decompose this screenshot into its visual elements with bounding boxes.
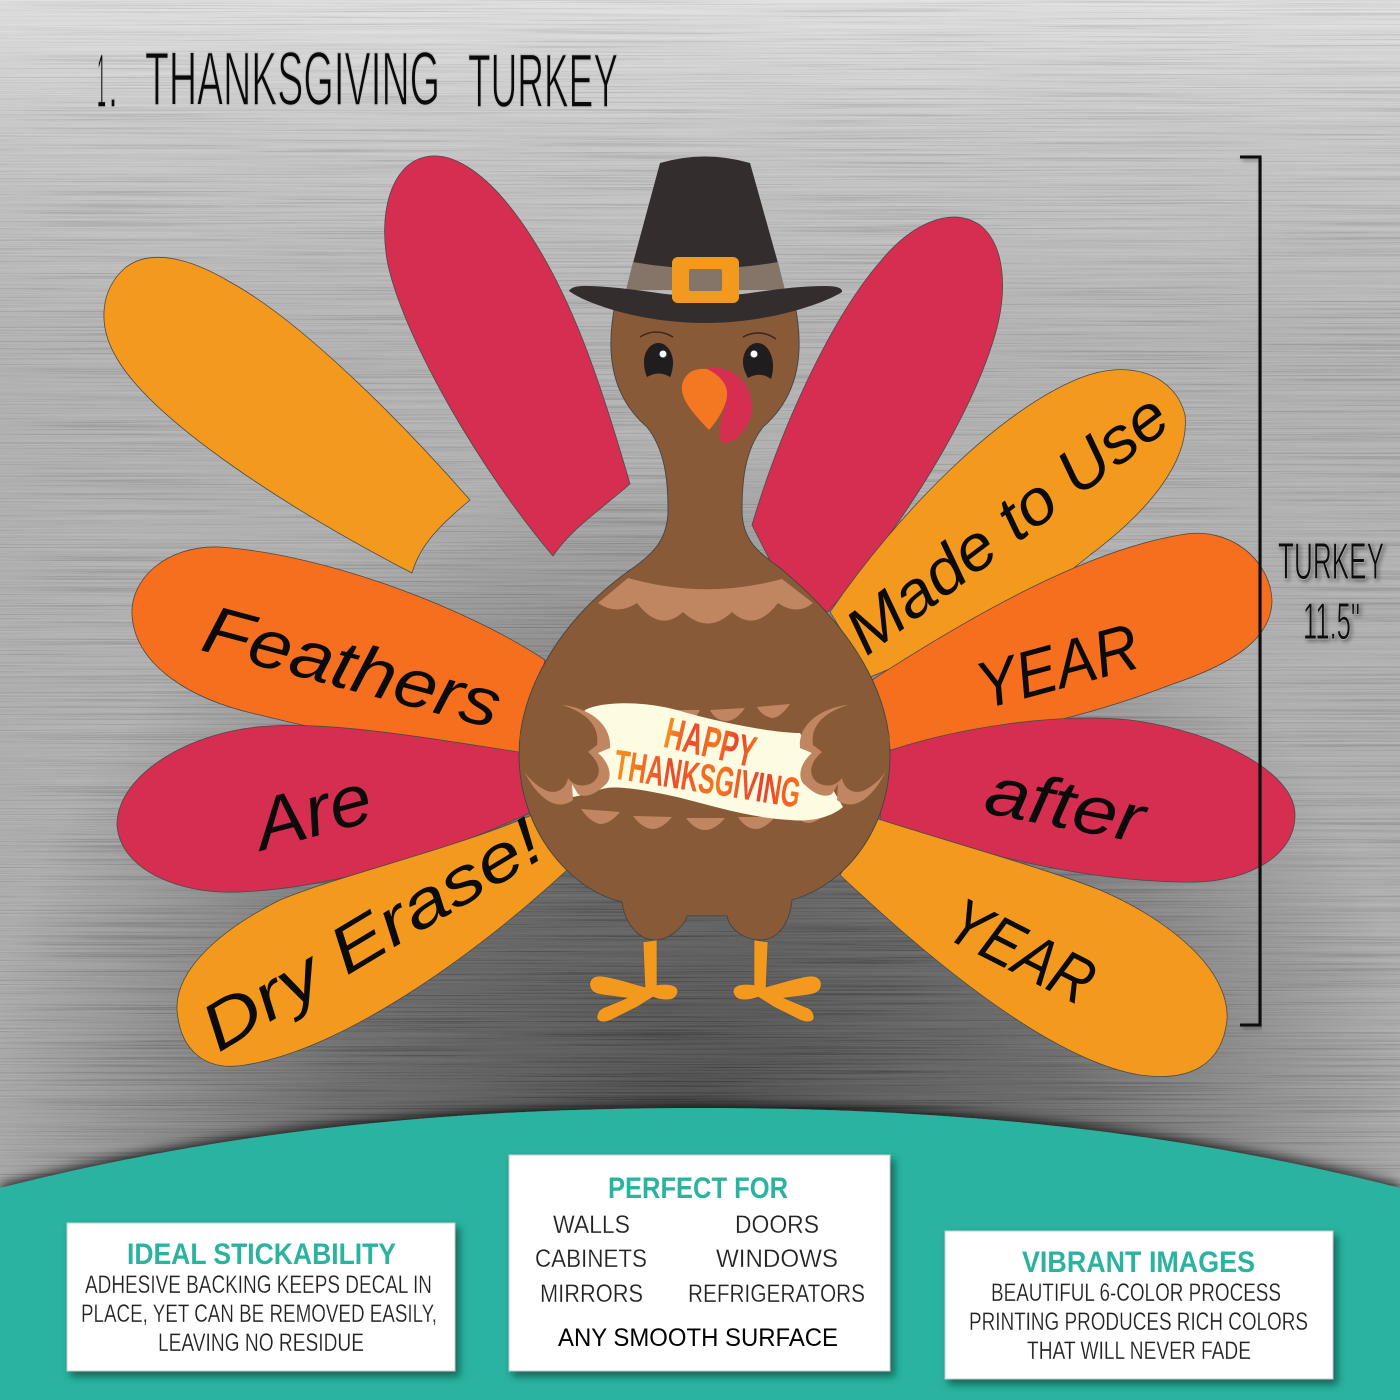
left wing <box>520 705 610 804</box>
feather: top right red <box>752 217 1003 612</box>
banner <box>560 703 843 820</box>
surface list <box>535 1211 865 1308</box>
title: THANKSGIVING <box>145 37 440 122</box>
surface list: DOORS <box>735 1211 819 1239</box>
body text: vibrant images: THAT WILL NEVER FADE <box>1027 1337 1251 1365</box>
heading: vibrant images: VIBRANT IMAGES <box>1022 1246 1255 1279</box>
handwritten words: Are <box>242 758 380 867</box>
feather: top left red <box>385 156 630 556</box>
eye highlights <box>660 350 758 358</box>
handwritten words: after <box>979 752 1154 858</box>
face <box>640 332 776 443</box>
surface list: MIRRORS <box>540 1280 643 1308</box>
heading: ideal stickability: IDEAL STICKABILITY <box>127 1238 396 1271</box>
body text: stickability: ADHESIVE BACKING KEEPS DECAL IN <box>85 1271 432 1299</box>
handwritten words <box>187 379 1182 1065</box>
chest scallops <box>581 704 825 830</box>
title: 1 <box>97 39 106 124</box>
size label <box>1278 533 1384 651</box>
legs and feet <box>590 940 821 1022</box>
heading: perfect for: PERFECT FOR <box>608 1172 788 1205</box>
surface list: WALLS <box>553 1211 630 1239</box>
handwritten words: Dry Erase! <box>187 803 556 1065</box>
teal footer curve <box>0 1108 1400 1400</box>
feather: YEAR yellow <box>840 818 1227 1077</box>
panel: perfect for <box>509 1155 890 1371</box>
handwritten words: YEAR <box>936 883 1107 1019</box>
pilgrim hat <box>569 156 842 323</box>
handwritten words: Made to Use <box>831 379 1182 668</box>
body text: stickability: PLACE, YET CAN BE REMOVED EASILY, <box>81 1300 437 1328</box>
left eye <box>644 343 673 377</box>
feather: Dry Erase <box>177 815 567 1066</box>
handwritten words: Feathers <box>195 591 509 743</box>
turkey decal <box>104 156 1295 1077</box>
collar scallops <box>598 578 813 624</box>
beak <box>682 369 727 430</box>
panel: vibrant images <box>945 1231 1333 1379</box>
any smooth surface: ANY SMOOTH SURFACE <box>558 1324 838 1352</box>
eyebrows <box>640 332 776 339</box>
size bracket <box>1240 157 1260 1025</box>
feather: Made to Use <box>830 370 1185 677</box>
right wing <box>800 705 890 804</box>
wattle <box>708 368 752 443</box>
banner text <box>611 709 804 817</box>
surface list: WINDOWS <box>716 1245 838 1273</box>
body text: stickability <box>81 1271 437 1357</box>
title: . <box>108 39 118 124</box>
feather: top left orange <box>104 257 470 573</box>
body text: vibrant images <box>969 1279 1308 1365</box>
turkey body, neck and head <box>519 300 890 940</box>
hat buckle <box>672 257 739 303</box>
banner text: HAPPY <box>660 709 761 777</box>
feather: Feathers <box>132 547 545 755</box>
feather: YEAR orange <box>872 533 1272 750</box>
feather: after <box>880 718 1295 882</box>
handwritten words: YEAR <box>968 609 1147 723</box>
text: TURKEY <box>468 39 618 124</box>
panel: ideal stickability <box>67 1223 455 1371</box>
banner text: THANKSGIVING <box>611 741 804 817</box>
feather: Are <box>117 725 532 892</box>
right eye <box>743 343 773 379</box>
surface list: CABINETS <box>535 1245 647 1273</box>
body text: vibrant images: BEAUTIFUL 6-COLOR PROCESS <box>991 1279 1281 1307</box>
surface list: REFRIGERATORS <box>688 1280 865 1308</box>
body text: stickability: LEAVING NO RESIDUE <box>158 1329 364 1357</box>
